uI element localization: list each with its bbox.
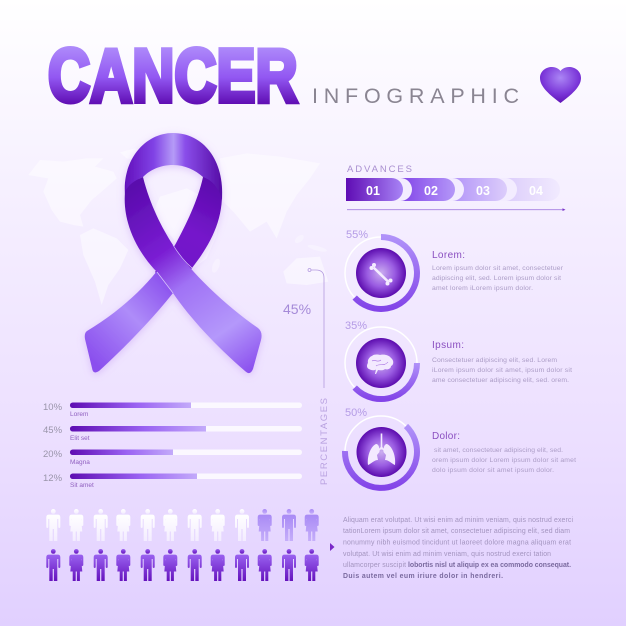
donut 50 xyxy=(345,416,417,488)
ribbon: back band xyxy=(155,170,222,293)
body dolor: sit amet, consectetuer adipiscing elit, sed. xyxy=(434,447,563,454)
bar: sit amet: 12% xyxy=(43,473,63,484)
world map xyxy=(28,148,328,305)
panel: ipsum xyxy=(345,320,572,399)
paragraph: lobortis nisl ut aliquip ex ea commodo consequat. xyxy=(408,562,571,569)
pictogram: top row xyxy=(46,509,319,541)
step 01: 01 xyxy=(366,184,380,198)
bar: elit set: Elit set xyxy=(70,435,90,442)
advances heading: ADVANCES xyxy=(347,164,412,175)
paragraph: nonummy nibh euismod tincidunt ut laoreet dolore magna aliquam erat xyxy=(343,540,571,546)
ribbon: front band xyxy=(125,177,262,373)
bar: sit amet xyxy=(43,473,302,489)
bar: magna: 20% xyxy=(43,449,63,460)
paragraph: tationLorem ipsum dolor sit amet, consectetuer adipiscing elit, sed diam xyxy=(343,528,570,535)
body dolor xyxy=(432,447,576,474)
step 04: 04 xyxy=(529,184,543,198)
body dolor: orem ipsum dolor Lorem ipsum dolor sit amet xyxy=(432,457,576,464)
bar: lorem: Lorem xyxy=(70,411,88,418)
body ipsum xyxy=(432,357,572,384)
arrow: advances xyxy=(347,208,566,211)
step 01 xyxy=(346,178,403,201)
body lorem xyxy=(432,265,564,292)
icon: heart xyxy=(540,67,581,103)
step 03: 03 xyxy=(476,184,490,198)
vertical label: percentages: PERCENTAGES xyxy=(319,398,330,485)
icon: lungs xyxy=(368,434,395,465)
bar: sit amet: Sit amet xyxy=(70,482,94,489)
percentage 55: 55% xyxy=(346,229,368,241)
percentage 50: 50% xyxy=(345,407,367,419)
body lorem: adipiscing elit, sed. Lorem ipsum dolor sit xyxy=(432,275,561,282)
panel: lorem xyxy=(345,229,564,309)
heading lorem: Lorem: xyxy=(432,250,465,261)
bar: elit set xyxy=(43,425,302,442)
icon: brain xyxy=(367,355,393,374)
bar: elit set: 45% xyxy=(43,425,63,436)
bar chart xyxy=(43,402,302,489)
percentage 45: 45% xyxy=(283,301,311,317)
body ipsum: ame consectetuer adipiscing elit, sed. orem. xyxy=(432,377,569,384)
donut 55 xyxy=(345,237,417,309)
body ipsum: Consectetuer adipiscing elit, sed. Lorem xyxy=(432,357,557,364)
paragraph: ullamcorper suscipit xyxy=(343,562,406,569)
bar: magna xyxy=(43,449,302,466)
bar: magna: Magna xyxy=(70,459,90,466)
icon: bone xyxy=(370,263,392,286)
percentage 35: 35% xyxy=(345,320,367,332)
bar: lorem: 10% xyxy=(43,402,63,413)
paragraph: Aliquam erat volutpat. Ut wisi enim ad minim veniam, quis nostrud exerci xyxy=(343,517,573,524)
subtitle: INFOGRAPHIC xyxy=(312,84,519,108)
panel: dolor xyxy=(345,407,576,488)
ribbon xyxy=(85,133,262,373)
step 04 xyxy=(505,178,560,201)
bar: lorem xyxy=(43,402,302,418)
paragraph xyxy=(343,517,573,580)
step 02: 02 xyxy=(424,184,438,198)
body lorem: amet lorem iLorem ipsum dolor. xyxy=(432,285,533,292)
paragraph: volutpat. Ut wisi enim ad minim veniam, quis nostrud exerci tation xyxy=(343,551,551,558)
ribbon: top loop xyxy=(125,133,222,200)
pictogram: bottom row xyxy=(46,549,319,581)
body lorem: Lorem ipsum dolor sit amet, consectetuer xyxy=(432,265,564,272)
advances steps xyxy=(346,178,560,201)
connector line xyxy=(308,268,324,388)
title: CANCER xyxy=(48,35,298,118)
ribbon: left tail xyxy=(85,271,173,372)
body dolor: dolo ipsum dolor sit amet ipsum dolor. xyxy=(432,467,554,474)
step 03 xyxy=(452,178,507,201)
arrow: paragraph pointer xyxy=(330,543,334,551)
body ipsum: iLorem ipsum dolor sit amet, ipsum dolor sit xyxy=(432,367,572,374)
paragraph: Duis autem vel eum iriure dolor in hendreri. xyxy=(343,573,503,580)
step 02 xyxy=(400,178,455,201)
heading ipsum: Ipsum: xyxy=(432,340,464,351)
donut 35 xyxy=(345,327,417,399)
heading dolor: Dolor: xyxy=(432,431,460,442)
